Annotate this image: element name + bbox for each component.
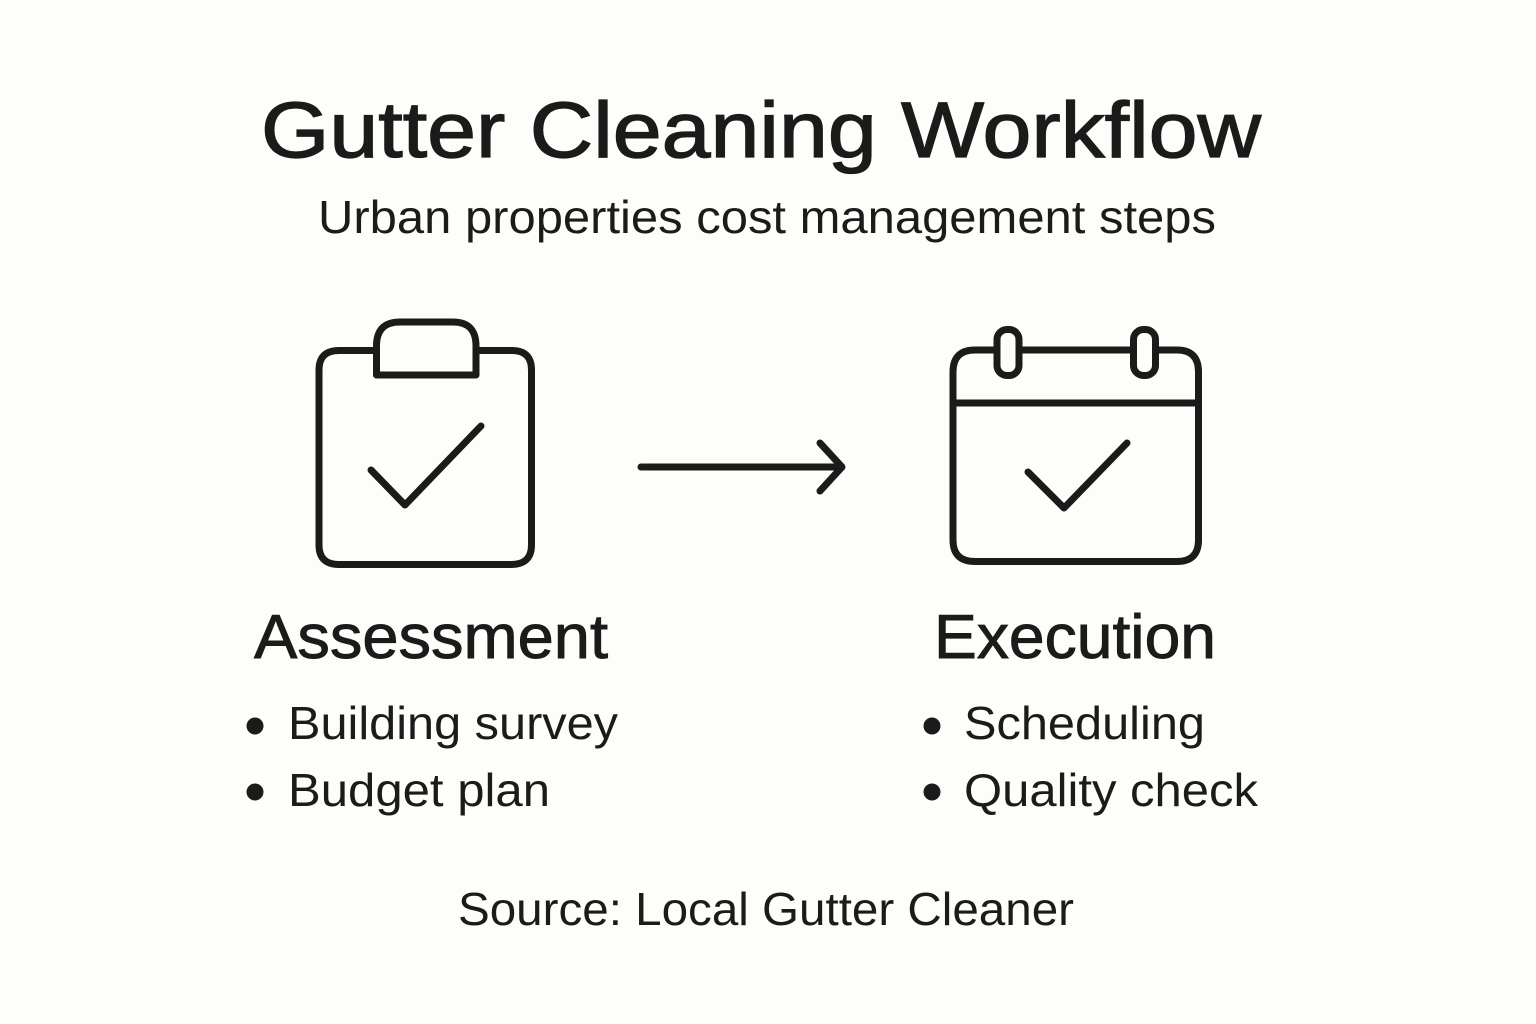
icon: calendar with check [953, 330, 1198, 562]
list: execution items: Scheduling [964, 697, 1205, 749]
list: assessment items: Budget plan [288, 764, 550, 816]
list: assessment items: Building survey [288, 697, 618, 749]
source note: Source: Local Gutter Cleaner [458, 883, 1074, 935]
icon: clipboard with check [319, 322, 532, 564]
list: assessment items [246, 697, 618, 816]
arrow [641, 443, 842, 491]
subtitle: Urban properties cost management steps [318, 191, 1216, 243]
heading: Assessment: Assessment [254, 603, 608, 672]
title: Gutter Cleaning Workflow [261, 85, 1262, 174]
heading: Execution: Execution [934, 603, 1216, 672]
list: execution items: Quality check [964, 764, 1259, 816]
list: execution items [924, 697, 1259, 816]
